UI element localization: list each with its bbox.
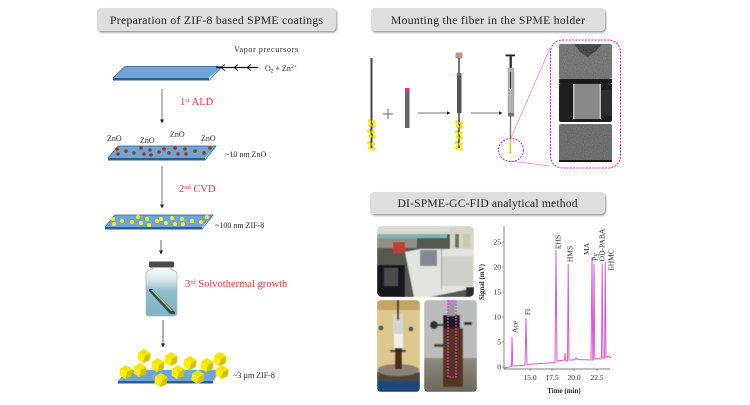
label: O2 + Zn2+: O <box>265 64 271 73</box>
label: 1st ALD: st <box>185 97 190 104</box>
y axis ticks: 20 <box>494 262 501 272</box>
label: O2 + Zn2+: 2+ <box>291 64 297 70</box>
arrow: step 3 <box>160 240 162 254</box>
y axis ticks <box>494 238 504 372</box>
arrow: step 2 <box>161 166 163 208</box>
label: 2nd CVD: nd <box>184 184 192 191</box>
label: vapor precursors: Vapor precursors <box>234 45 298 54</box>
photo: GC instrument <box>377 226 474 297</box>
arrow: to assembly <box>418 112 450 114</box>
label: 2nd CVD: 2 <box>179 184 184 195</box>
step 0: bare slide with precursors <box>113 64 297 80</box>
step 2: slide with ZIF-8 seeds <box>105 215 213 230</box>
zoom lines <box>511 48 550 166</box>
peak labels: EHMC <box>606 249 616 271</box>
heading: Mounting the fiber in the SPME holder: Mounting the fiber in the SPME holder <box>391 14 585 27</box>
fiber with coating <box>367 58 376 151</box>
label: 10 nm ZnO: ~10 nm ZnO <box>225 150 266 159</box>
label: 3rd Solvothermal growth: 3 <box>185 279 190 290</box>
y axis ticks: 10 <box>494 312 501 322</box>
arrow: step 4 <box>162 320 164 347</box>
panel: fiber mounting <box>367 40 620 168</box>
y axis ticks: 15 <box>494 288 501 296</box>
SEM image top <box>559 44 612 79</box>
axes <box>504 226 610 369</box>
label: 100 nm ZIF-8: ~100 nm ZIF-8 <box>215 221 264 230</box>
y axis ticks: 5 <box>497 338 501 346</box>
peak labels: Py <box>590 253 600 261</box>
peak labels: Fl <box>523 309 532 315</box>
ZnO labels: ZnO <box>201 134 216 143</box>
heading: Preparation of ZIF-8 based SPME coatings: Preparation of ZIF-8 based SPME coatings <box>110 14 323 27</box>
label: O2 + Zn2+: 2 <box>271 68 274 74</box>
label: 2nd CVD: CVD <box>191 184 216 195</box>
label: 1st ALD: 1 <box>180 97 185 108</box>
chart: chromatogram <box>478 226 616 395</box>
label: 3 um ZIF-8: ~3 µm ZIF-8 <box>233 371 275 380</box>
arrow: step 1 <box>161 89 163 123</box>
label: 1st ALD: ALD <box>190 97 214 108</box>
icon: solvothermal jar <box>146 262 177 316</box>
y axis ticks: 0 <box>497 362 501 372</box>
x axis ticks: 15.0 <box>523 373 537 382</box>
ZnO labels <box>107 130 216 145</box>
peak labels: MA <box>582 242 591 255</box>
heading: DI-SPME-GC-FID analytical method: DI-SPME-GC-FID analytical method <box>398 197 578 210</box>
plus sign <box>383 109 393 119</box>
step 3: slide with ZIF-8 crystals <box>118 349 228 387</box>
y axis label: Signal (mV) <box>478 263 486 300</box>
panel: preparation of coatings <box>105 45 298 387</box>
x axis ticks <box>523 369 604 382</box>
photo: extraction vial close-up <box>424 300 477 392</box>
peak labels: OD-PABA <box>598 228 606 261</box>
ZnO labels: ZnO <box>107 134 122 143</box>
photo: extraction stand <box>377 300 420 392</box>
heading: DI-SPME-GC-FID analytical method <box>370 192 605 214</box>
peak labels <box>510 228 616 333</box>
guide tube <box>405 88 410 128</box>
y axis ticks: 25 <box>494 238 501 246</box>
dashed circle <box>498 138 524 162</box>
SPME holder <box>506 54 515 154</box>
heading: Mounting the fiber in the SPME holder <box>371 8 605 31</box>
assembled fiber <box>455 52 463 151</box>
ZnO labels: ZnO <box>140 136 155 145</box>
x axis ticks: 20.0 <box>567 373 581 382</box>
chromatogram trace <box>504 250 611 368</box>
peak labels: HMS <box>566 246 574 262</box>
label: O2 + Zn2+: + Zn <box>274 64 291 73</box>
label: 3rd Solvothermal growth: rd <box>190 279 196 286</box>
peak labels: EHS <box>554 235 562 249</box>
label: 3rd Solvothermal growth: Solvothermal growth <box>196 279 288 290</box>
SEM image bottom <box>559 124 612 162</box>
peak labels: Ace <box>510 320 520 333</box>
ZnO labels: ZnO <box>170 130 185 139</box>
step 1: slide with ZnO <box>108 146 216 160</box>
arrow: to holder <box>471 112 502 114</box>
x axis ticks: 17.5 <box>545 373 559 382</box>
x axis label: Time (min) <box>547 387 581 395</box>
x axis ticks: 22.5 <box>590 373 604 382</box>
SEM image middle <box>559 83 612 122</box>
heading: Preparation of ZIF-8 based SPME coatings <box>97 8 336 31</box>
magnified SEM panel <box>550 40 620 168</box>
